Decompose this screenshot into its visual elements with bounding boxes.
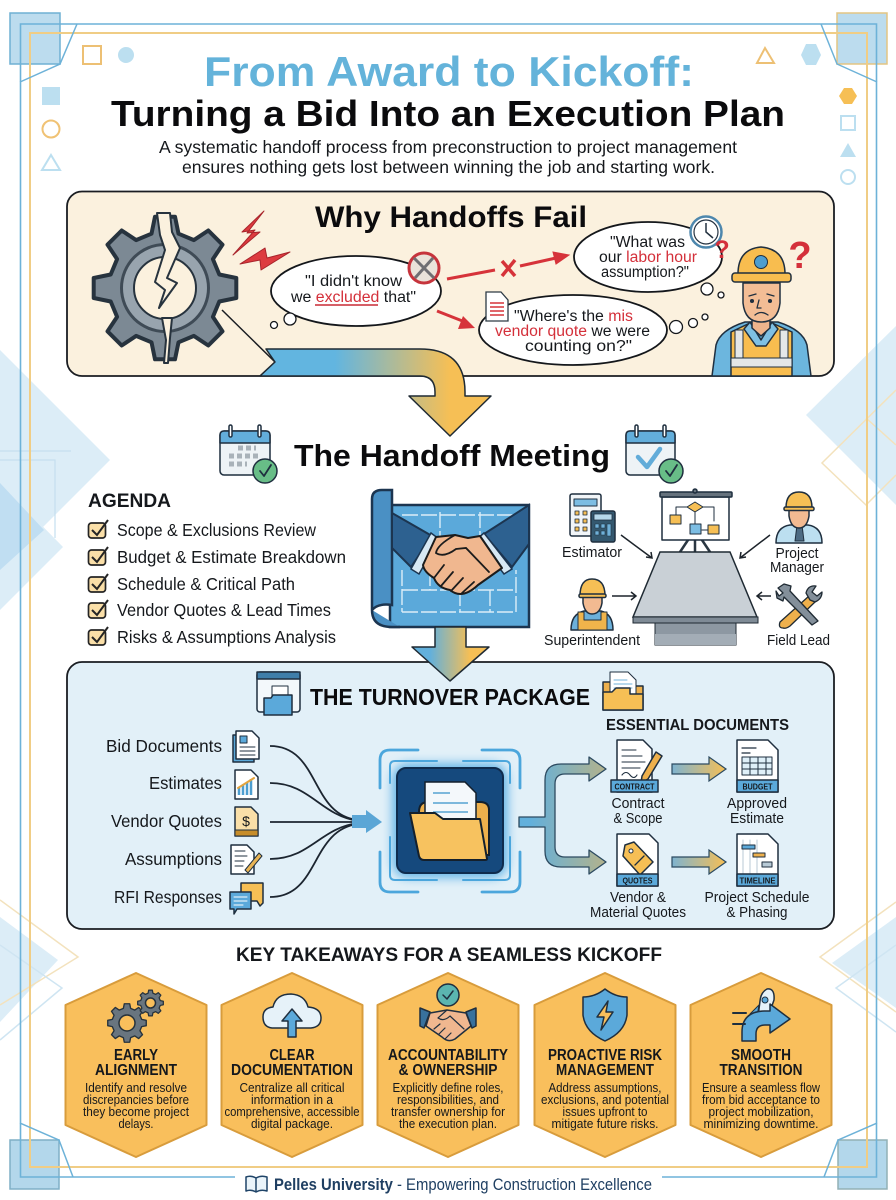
icon: crossed out pencil [409,253,439,283]
icon: vendor quotes [235,807,258,836]
text: clear documentation [224,1047,360,1131]
text: proactive risk: issues upfront to [562,1105,648,1119]
document: contract and scope: Contract [612,796,664,812]
icon: open book [246,1176,267,1192]
document: project schedule and phasing: TIMELINE [740,876,776,886]
document: approved estimate: Estimate [730,811,784,827]
speech bubble: labor hour: our labor hour [599,249,697,266]
icon: clock with question mark [690,216,730,264]
speech bubble: labor hour: "What was [610,234,685,251]
document: approved estimate: Approved [727,796,787,812]
agenda list: Schedule & Critical Path [117,574,295,594]
agenda list: Scope & Exclusions Review [117,520,316,540]
text: clear documentation: Centralize all critical [240,1081,344,1095]
text: clear documentation: information in a [251,1093,333,1107]
icon: project manager [776,492,822,543]
icon: central folder [380,750,520,892]
text: clear documentation: CLEAR [270,1047,315,1064]
agenda list [88,491,346,647]
icon: calendar left [220,425,277,483]
table [633,552,758,645]
subtitle [159,137,737,177]
hexagon: proactive risk management [534,973,676,1157]
icon: crossed wrenches [776,584,822,628]
icon: assumptions [231,845,262,874]
speech bubble: labor hour [574,222,724,298]
text: smooth transition: SMOOTH [731,1047,791,1064]
icon: calculators [570,494,615,542]
icon: yellow folder [603,672,643,710]
label: field lead: Field Lead [767,633,830,649]
text: accountability: Explicitly define roles, [392,1081,504,1095]
agenda list: Risks & Assumptions Analysis [117,627,336,647]
curved lines converging to folder [270,746,382,897]
speech bubble: labor hour: assumption?" [601,264,689,281]
text: accountability [388,1047,508,1131]
heading: essential documents: ESSENTIAL DOCUMENTS [606,717,789,734]
text: early alignment: EARLY [114,1047,158,1064]
document: contract and scope: & Scope [614,811,662,827]
panel: why handoffs fail [67,192,834,436]
title: Turning a Bid Into an Execution Plan [111,93,785,134]
text: proactive risk: exclusions, and potential [541,1093,669,1107]
heading: the turnover package: THE TURNOVER PACKAGE [310,684,590,710]
text: proactive risk [541,1047,669,1131]
speech bubble: vendor quote: vendor quote we were [495,323,650,340]
text: early alignment: ALIGNMENT [95,1062,177,1079]
document: project schedule and phasing: Project Schedule [704,890,810,906]
list: input documents: RFI Responses [114,887,222,907]
document: vendor and material quotes: Vendor & [610,890,666,906]
subtitle: ensures nothing gets lost between winning the job and starting work. [182,157,715,177]
text: early alignment: Identify and resolve [85,1081,187,1095]
text: early alignment [83,1047,189,1131]
icon: shield with bolt [583,989,627,1041]
document: project schedule and phasing: & Phasing [726,905,788,921]
document: approved estimate: BUDGET [742,782,773,792]
text: clear documentation: digital package. [251,1117,333,1131]
icon: cloud upload [263,994,321,1037]
speech bubble: excluded [270,256,441,328]
text: accountability: responsibilities, and [397,1093,499,1107]
text: smooth transition: project mobilization, [708,1105,814,1119]
label: project manager [770,546,824,576]
document: contract and scope [611,740,664,827]
icon: superintendent [571,579,613,630]
text: accountability: transfer ownership for [391,1105,505,1119]
document: contract and scope: CONTRACT [614,782,655,792]
title [111,48,785,134]
background decoration [0,326,896,1040]
list: input documents: Bid Documents [106,736,222,756]
icon: red document [486,292,508,321]
hexagon: smooth transition [690,973,832,1157]
agenda list: Vendor Quotes & Lead Times [117,600,331,620]
arrow: branch to essential documents [519,757,606,874]
footer [246,1176,652,1194]
speech bubble: excluded: we excluded that" [290,289,416,306]
text: smooth transition: minimizing downtime. [704,1117,818,1131]
speech bubble: vendor quote: counting on?" [525,338,632,355]
icon: clock with question mark: ? [714,236,730,264]
document: approved estimate [727,740,787,827]
subtitle: A systematic handoff process from preconstruction to project management [159,137,737,157]
icon: broken gear [94,213,236,363]
text: clear documentation: DOCUMENTATION [231,1062,353,1079]
meeting table diagram [544,489,830,649]
arrow: red to vendor quote bubble [437,311,475,329]
list: input documents [106,736,222,907]
heading: why handoffs fail: Why Handoffs Fail [315,201,587,234]
icon: bid documents [233,731,259,762]
text: proactive risk: Address assumptions, [548,1081,662,1095]
heading: the handoff meeting: The Handoff Meeting [294,438,610,473]
list: input documents: Estimates [149,773,222,793]
document: vendor and material quotes [590,834,686,921]
icon: browser window with folder [257,672,300,715]
icon: red lightning bolts [233,211,290,270]
text: smooth transition [702,1047,821,1131]
agenda list: Budget & Estimate Breakdown [117,547,346,567]
document: vendor and material quotes: Material Quotes [590,905,686,921]
text: smooth transition: from bid acceptance to [702,1093,820,1107]
text: smooth transition: TRANSITION [720,1062,802,1079]
illustration: blueprint and handshake [372,490,529,627]
arrow: blueprint down to turnover package [412,627,489,681]
arrow: red with x to labor hour bubble [447,252,569,279]
label: superintendent: Superintendent [544,633,640,649]
text: accountability: & OWNERSHIP [398,1062,498,1079]
text: proactive risk: mitigate future risks. [552,1117,658,1131]
text: smooth transition: Ensure a seamless flow [702,1081,821,1095]
label: estimator: Estimator [562,545,622,561]
speech bubble: excluded: "I didn't know [305,273,403,290]
icon: handshake with check [420,984,476,1041]
icon: rfi chat bubbles [230,883,263,914]
text: proactive risk: MANAGEMENT [556,1062,654,1079]
icon: calendar right [626,425,683,483]
text: clear documentation: comprehensive, accessible [224,1105,360,1119]
arrows: roles pointing to table [612,535,771,600]
icon: worried worker: ? [788,235,812,277]
heading: key takeaways: KEY TAKEAWAYS FOR A SEAMLESS KICKOFF [236,944,662,966]
list: input documents: Vendor Quotes [111,811,222,831]
icon: easel with flowchart [660,489,732,552]
text: accountability: the execution plan. [399,1117,497,1131]
hexagon: early alignment [66,973,206,1157]
icon: vendor quotes: $ [242,813,250,829]
text: proactive risk: PROACTIVE RISK [548,1047,662,1064]
label: project manager: Manager [770,560,824,576]
decorative small shapes [42,44,857,184]
icon: gears [108,990,163,1042]
footer text: Pelles University - Empowering Construction Excellence [274,1176,652,1194]
document: project schedule and phasing [704,834,810,921]
arrow: blue to gold turn [222,310,491,436]
icon: estimates [235,770,258,799]
text: early alignment: delays. [118,1117,154,1131]
text: early alignment: discrepancies before [83,1093,189,1107]
speech bubble: vendor quote: "Where's the mis [514,308,633,325]
hexagon: accountability and ownership [378,973,518,1157]
panel: the turnover package [67,662,834,929]
icon: rocket and arrow [733,989,790,1041]
list: input documents: Assumptions [125,849,222,869]
text: early alignment: they become project [83,1105,189,1119]
text: accountability: ACCOUNTABILITY [388,1047,508,1064]
document: vendor and material quotes: QUOTES [622,876,653,886]
speech bubble: vendor quote [479,295,708,365]
agenda list: AGENDA [88,491,171,512]
arrow: quotes to schedule [672,850,726,874]
arrow: contract to estimate [672,757,726,781]
icon: worried worker [712,235,812,376]
title: From Award to Kickoff: [204,48,694,95]
label: project manager: Project [776,546,818,562]
hexagon: clear documentation [222,973,362,1157]
